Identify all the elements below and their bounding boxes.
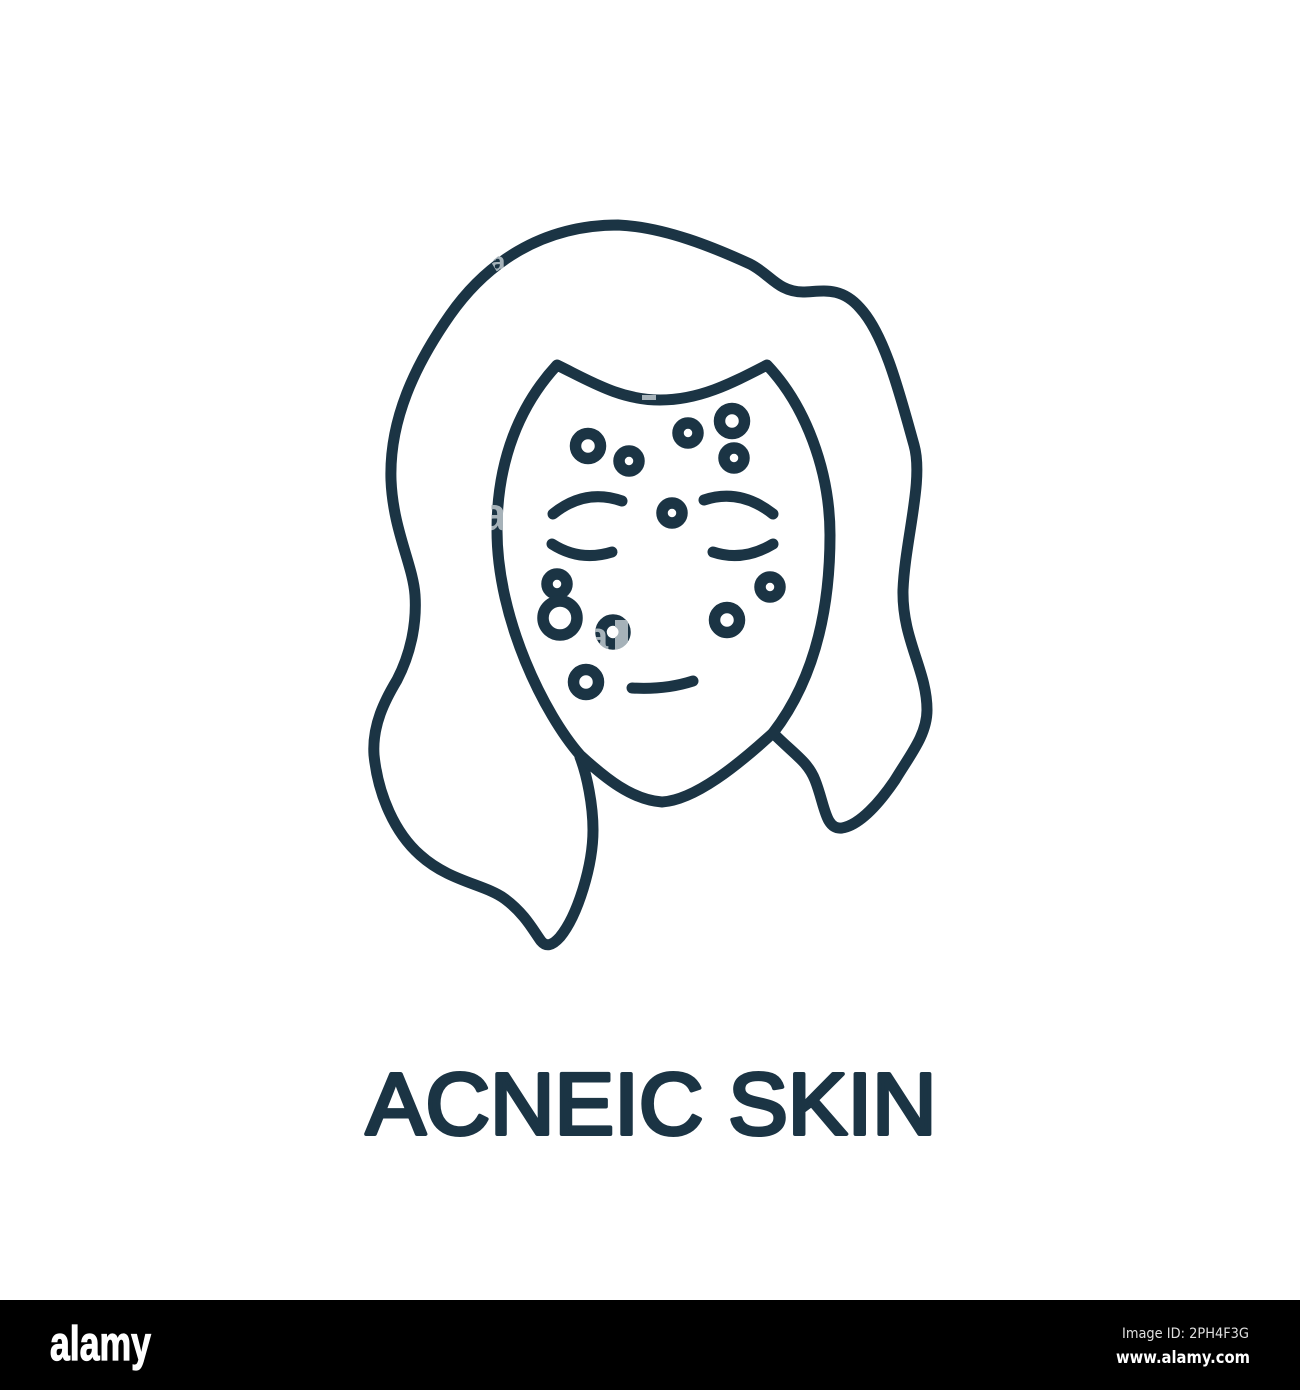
image id: Image ID: 2PH4F3G: [1122, 1326, 1249, 1342]
footer bar: [0, 1300, 1300, 1390]
eyes: [552, 544, 773, 556]
title: ACNEIC SKIN: [366, 1055, 937, 1153]
acne spots: [543, 408, 780, 694]
alamy logo: alamy: [50, 1318, 151, 1371]
hair outline: [374, 225, 927, 945]
watermark fragments: a: [587, 616, 609, 658]
face outline: [497, 365, 830, 802]
mouth: [632, 681, 693, 688]
watermark fragments: [492, 256, 656, 650]
watermark fragments: a: [481, 488, 507, 540]
eyebrows: [553, 496, 773, 514]
icon: woman's head with acne: [374, 225, 927, 945]
website: www.alamy.com: [1116, 1348, 1250, 1368]
watermark fragments: a: [490, 246, 506, 277]
